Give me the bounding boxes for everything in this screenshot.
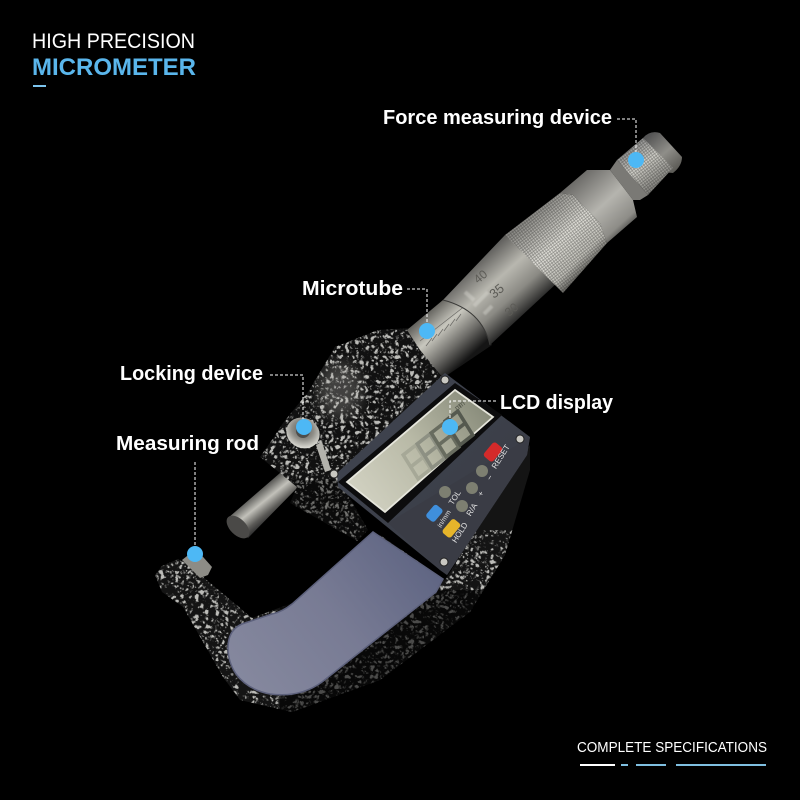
- ratchet end: [643, 132, 682, 173]
- button labels: −: [485, 473, 495, 482]
- lcd unit: mm: [453, 399, 467, 413]
- hold button: [441, 518, 461, 539]
- blue grip panel: [228, 532, 443, 695]
- ratchet neck: [610, 160, 648, 200]
- anvil: [182, 549, 212, 578]
- scale numbers: 40: [471, 267, 490, 286]
- measuring spindle rod: [222, 473, 298, 543]
- callout: microtube: [302, 278, 435, 339]
- footer label: COMPLETE SPECIFICATIONS: [577, 740, 767, 756]
- button labels: in/mm: [437, 509, 453, 529]
- callout: lcd display: LCD display: [500, 392, 614, 414]
- screws: [330, 376, 524, 566]
- button labels: TOL: [447, 488, 463, 507]
- C frame: [150, 445, 540, 720]
- textured body casting: [255, 325, 445, 550]
- lcd bezel: [338, 383, 502, 523]
- callout: measuring rod: [116, 433, 259, 562]
- button labels: [437, 443, 512, 544]
- callout: measuring rod: Measuring rod: [116, 433, 259, 455]
- round buttons: [439, 465, 488, 512]
- title accent bar: [33, 85, 46, 87]
- button labels: RESET: [490, 443, 512, 470]
- lcd screen: [347, 390, 493, 512]
- knurled ratchet cap: [617, 138, 673, 195]
- callout: locking device: [120, 363, 312, 435]
- reset button: [483, 441, 503, 463]
- scale marks: [465, 292, 492, 314]
- lower button plate: [388, 437, 530, 575]
- thimble: [443, 235, 557, 345]
- units button: [425, 504, 444, 523]
- display module: [330, 373, 530, 575]
- button labels: R/A: [465, 501, 480, 518]
- button labels: HOLD: [450, 521, 470, 544]
- scale numbers: 30: [502, 300, 521, 319]
- scale numbers: [471, 267, 521, 319]
- callout: microtube: Microtube: [302, 278, 403, 300]
- callout: locking device: Locking device: [120, 363, 263, 385]
- title: [32, 30, 196, 87]
- microtube sleeve: [407, 300, 492, 378]
- micrometer product illustration: [150, 132, 682, 720]
- knurled ring: [505, 193, 607, 293]
- lcd digits: [403, 411, 473, 479]
- callout: force measuring device: Force measuring device: [383, 107, 612, 129]
- upper barrel: [560, 170, 637, 243]
- callout: lcd display: [442, 392, 614, 435]
- locking device: [281, 412, 331, 472]
- scale numbers: 35: [486, 281, 507, 301]
- title line 1: HIGH PRECISION: [32, 30, 195, 53]
- callout: force measuring device: [383, 107, 644, 168]
- title line 2: MICROMETER: [32, 54, 196, 81]
- button labels: +: [476, 489, 486, 498]
